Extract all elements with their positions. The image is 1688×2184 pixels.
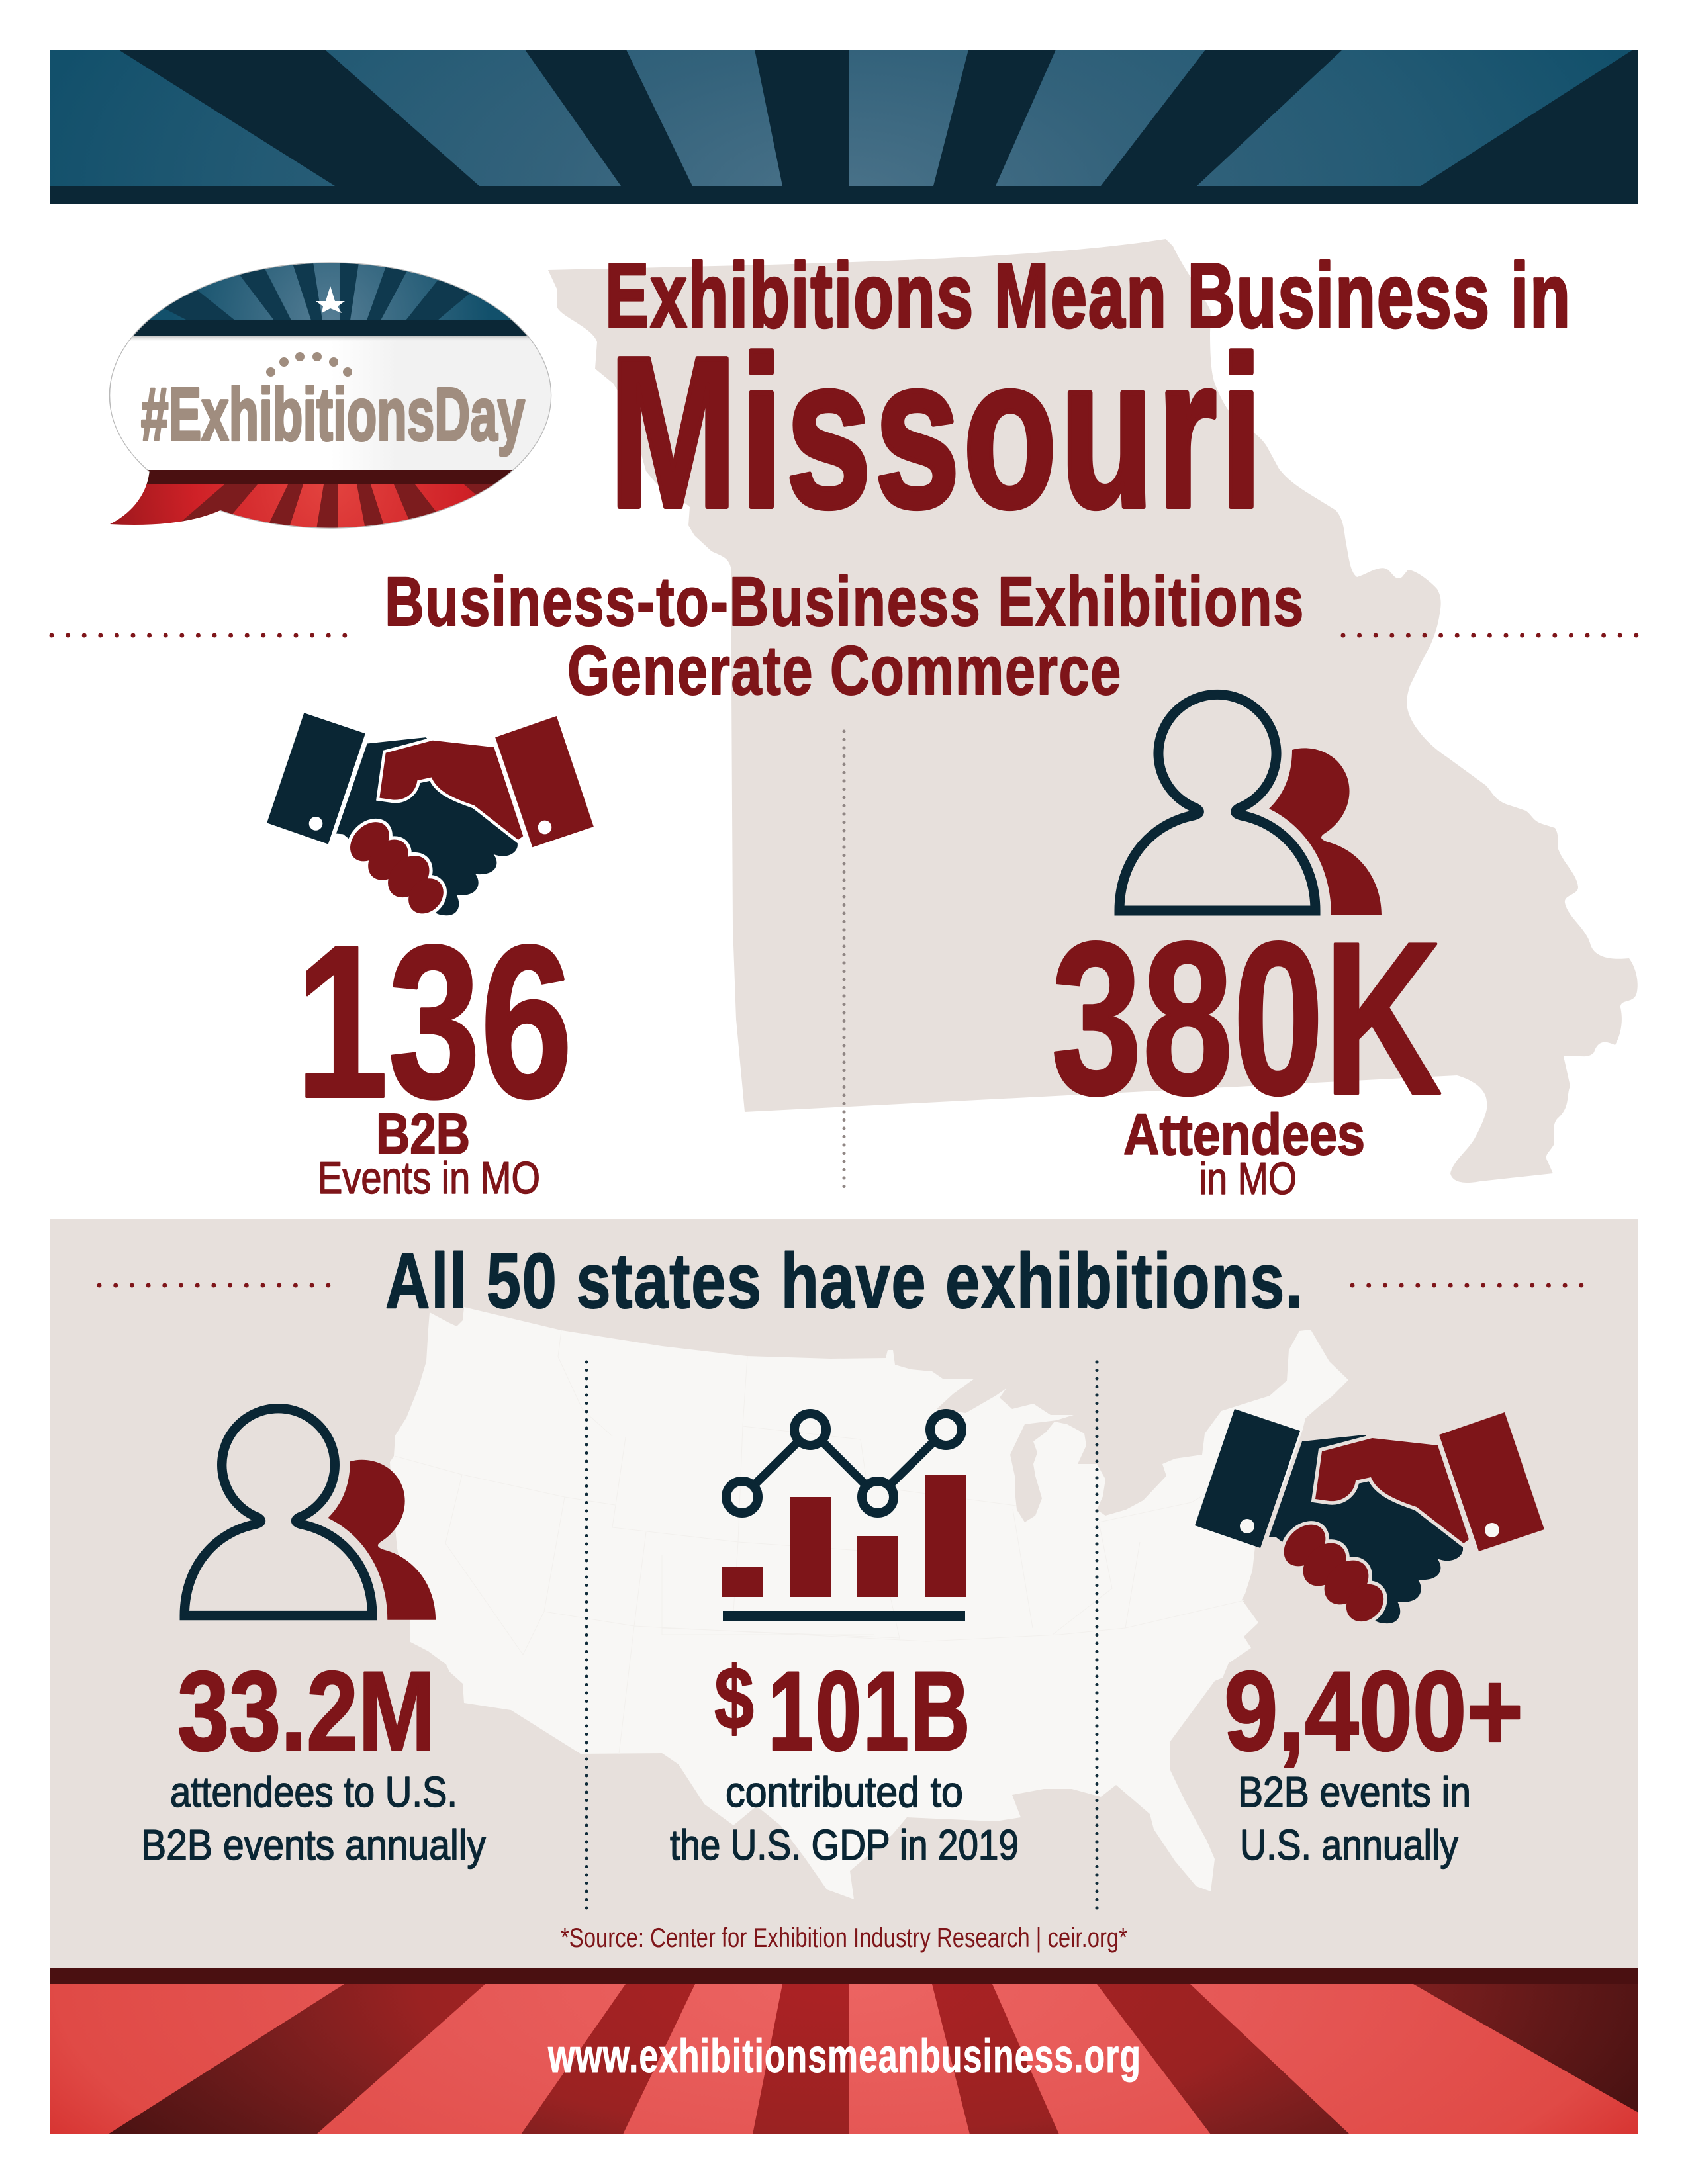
top banner with blue sunburst [50,50,1638,204]
badge: #ExhibitionsDay speech bubble [106,258,556,531]
text: B2B events: B2B events in [1238,1768,1471,1816]
US map [390,1307,1348,1899]
source note: *Source: Center for Exhibition Industry Research | ceir.org* [561,1922,1127,1953]
text: contributed [670,1768,1019,1869]
bottom banner with red sunburst [50,1968,1638,2134]
website URL: www.exhibitionsmeanbusiness.org [547,2030,1141,2083]
label: Events in MO: Events in MO [318,1153,540,1203]
text: attendees: attendees to U.S. [170,1768,457,1816]
text: contributed: the U.S. GDP in 2019 [670,1821,1019,1869]
icon: chart [722,1414,966,1621]
label: B2B: B2B [376,1102,470,1166]
label: in MO: in MO [1199,1154,1297,1204]
dotted arc [266,352,352,377]
text: contributed: contributed to [726,1768,963,1816]
title: Missouri: Missouri [609,312,1266,552]
icon: star [316,286,345,313]
heading: business-to-business: Business-to-Business Exhibitions [385,563,1305,641]
heading: all 50 states: All 50 states have exhibitions. [385,1238,1304,1325]
icon: handshake [267,713,594,921]
stat: 101B: 101B [768,1649,972,1774]
text: B2B events [1238,1768,1471,1869]
heading: business-to-business: Generate Commerce [567,632,1122,709]
stat: 9,400+: 9,400+ [1224,1649,1523,1774]
text: B2B events: U.S. annually [1240,1821,1458,1869]
stat: dollar sign: $ [714,1649,754,1748]
icon: handshake (panel) [1195,1409,1544,1629]
text: attendees [141,1768,486,1869]
stat: 380K: 380K [1051,897,1442,1140]
text: attendees: B2B events annually [141,1821,486,1869]
panel: all 50 states [50,1219,1638,1968]
hashtag text: #ExhibitionsDay [141,373,525,456]
icon: attendees [1119,694,1382,915]
heading: business-to-business [385,563,1305,709]
icon: attendees (panel) [185,1408,436,1620]
label: Attendees: Attendees [1123,1103,1365,1167]
stat: 33.2M: 33.2M [177,1649,436,1774]
Missouri state silhouette [548,239,1638,1183]
stat: 136: 136 [296,900,573,1143]
